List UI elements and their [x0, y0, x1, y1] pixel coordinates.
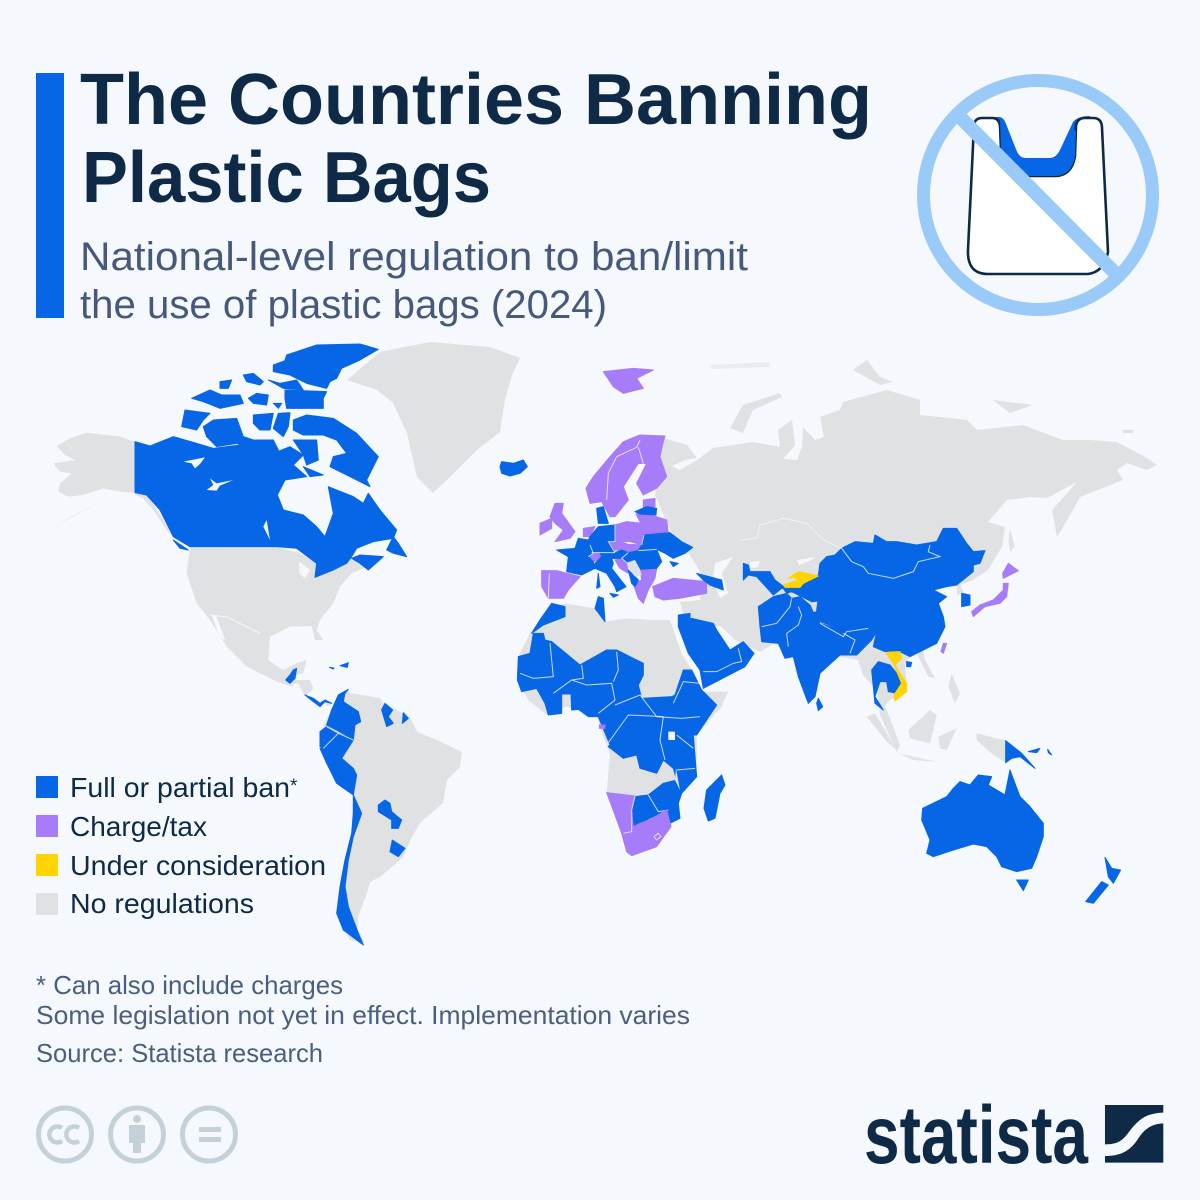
region: Central America land — [270, 667, 333, 707]
subtitle: National-level regulation to ban/limit — [80, 235, 748, 279]
title: The Countries Banning — [80, 60, 872, 140]
region: Africa and Arabia bans — [517, 618, 754, 827]
legend item: full or partial ban: * — [290, 776, 298, 797]
Serbia (no regulations) — [627, 560, 642, 577]
region: Africa borders — [520, 643, 742, 812]
region: Asia — [740, 518, 1018, 711]
footnotes and source: Source: Statista research — [36, 1038, 323, 1068]
region: Arctic Russian islands — [710, 360, 1133, 433]
subtitle — [80, 235, 748, 327]
subtitle: the use of plastic bags (2024) — [80, 283, 607, 327]
countries: charge or tax — [540, 368, 707, 603]
Kashmir and Himalaya gap — [810, 602, 817, 612]
footnotes and source: Some legislation not yet in effect. Implementation varies — [36, 1000, 690, 1030]
region: Asia borders — [740, 518, 940, 653]
accent bar — [36, 73, 64, 318]
legend item: no regulations: No regulations — [70, 888, 254, 919]
title: Plastic Bags — [82, 138, 491, 218]
countries: under consideration — [783, 572, 907, 701]
region: North America land — [53, 433, 367, 687]
footnotes and source — [36, 970, 690, 1068]
region: Aral Sea — [750, 561, 760, 568]
footnotes and source: * Can also include charges — [36, 970, 343, 1000]
region: Canadian lakes — [183, 457, 270, 540]
US Mexico border — [210, 615, 260, 633]
icon: creative commons license — [38, 1108, 236, 1161]
countries: charge or tax — [941, 563, 1018, 653]
world map — [53, 342, 1157, 945]
region: Greenland — [347, 342, 520, 493]
region: Canada (full or partial ban) — [135, 344, 407, 577]
region: South America borders — [323, 727, 353, 748]
icon: banned plastic bag — [924, 80, 1152, 310]
countries: full or partial ban — [743, 528, 985, 711]
legend item: full or partial ban: Full or partial ban — [70, 772, 290, 803]
Sakhalin — [1008, 528, 1015, 552]
region: South America land — [320, 690, 462, 943]
region: Africa land — [518, 603, 728, 855]
region: Southern Africa charges — [599, 725, 671, 856]
region: Balkhash — [797, 557, 815, 565]
region: South America bans — [286, 663, 408, 945]
legend — [36, 772, 326, 919]
region: Southeast Asia islands — [867, 637, 1006, 763]
legend item: under consideration: Under consideration — [70, 850, 326, 881]
region: Eurasia (no regulations) — [655, 390, 1157, 752]
logo: Statista: statista — [864, 1090, 1089, 1181]
region: Caspian Sea — [713, 557, 733, 598]
region: Southern Africa borders — [623, 796, 661, 840]
title — [80, 60, 872, 218]
countries: full or partial ban — [500, 460, 723, 633]
legend item: charge or tax: Charge/tax — [70, 811, 207, 842]
region: Europe borders — [548, 440, 657, 598]
logo mark — [1105, 1105, 1163, 1163]
region: Europe — [500, 368, 723, 633]
region: Oceania — [922, 741, 1121, 903]
